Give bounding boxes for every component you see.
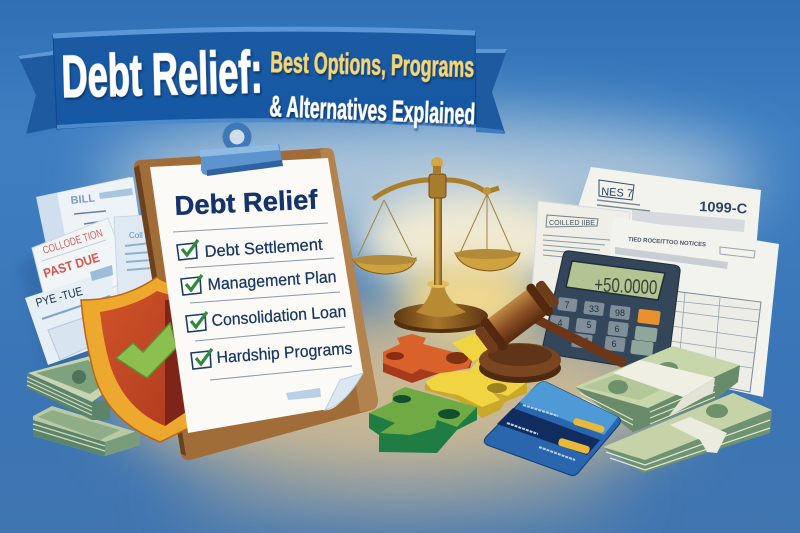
banner right tail xyxy=(476,49,507,134)
bill sheet back xyxy=(36,177,140,322)
1099-C form: 1099-C xyxy=(699,198,748,217)
yellow piece xyxy=(425,334,527,418)
folder sheet: Coll xyxy=(129,231,143,240)
banner highlights xyxy=(53,29,476,127)
item: management plan: Management Plan xyxy=(207,268,337,294)
collection form xyxy=(530,201,630,360)
banner left tail xyxy=(18,51,60,138)
calculator screen: +50.0000 xyxy=(594,274,658,299)
title banner xyxy=(18,29,507,138)
folder sheet xyxy=(114,215,158,300)
1099-C form: NES 7 xyxy=(601,186,633,200)
lower right stack xyxy=(603,393,772,473)
calculator keys xyxy=(549,297,661,356)
upper right stack xyxy=(575,346,740,432)
upper money stack xyxy=(27,356,122,420)
right money stacks xyxy=(575,346,772,473)
credit card xyxy=(484,382,620,476)
subtitle line 2: & Alternatives Explained xyxy=(269,90,476,131)
scale pillar and beam xyxy=(373,157,499,285)
red piece xyxy=(383,334,473,383)
bill sheet: BILL xyxy=(70,192,96,207)
left stack of bills and notices xyxy=(20,177,158,385)
green piece xyxy=(369,387,477,453)
calculator keys: 4 xyxy=(557,318,563,328)
clipboard xyxy=(134,148,378,460)
checklist row lines xyxy=(173,223,352,380)
shield inner xyxy=(100,291,186,426)
lower money stack xyxy=(33,406,140,456)
puzzle pieces xyxy=(369,334,527,453)
scale base xyxy=(394,280,488,333)
gavel handle xyxy=(532,316,628,368)
1099-C form xyxy=(560,167,761,300)
right back documents xyxy=(530,167,779,397)
shield with check xyxy=(81,277,195,442)
bill sheet xyxy=(57,177,150,305)
calculator keys: 33 xyxy=(589,304,599,314)
collection notice xyxy=(32,218,132,312)
checklist paper xyxy=(150,158,363,433)
notices form: TIED ROCEITTOO NOTICES xyxy=(628,237,706,248)
banner main ribbon xyxy=(53,29,476,129)
gavel xyxy=(471,276,628,383)
collection notice: PAST DUE xyxy=(41,249,102,281)
calculator xyxy=(543,251,680,372)
past-due sheet xyxy=(25,265,118,365)
shield body xyxy=(81,277,195,442)
gavel head xyxy=(471,276,563,358)
scales of justice xyxy=(353,157,520,333)
gavel block xyxy=(479,343,561,383)
left money stacks xyxy=(27,356,140,456)
shield check mark xyxy=(116,323,177,378)
item: hardship programs: Hardship Programs xyxy=(216,340,353,367)
past-due sheet: PYE -TUE xyxy=(34,284,84,310)
left pan xyxy=(353,200,417,274)
calculator keys: 6 xyxy=(614,324,620,334)
calculator keys: 1 xyxy=(584,336,590,346)
collection notice: COLLODE TION xyxy=(41,227,104,257)
item: consolidation loan: Consolidation Loan xyxy=(211,303,347,330)
page curl xyxy=(325,373,363,410)
item: debt settlement: Debt Settlement xyxy=(204,236,323,261)
title: Debt Relief: Debt Relief: xyxy=(61,39,263,110)
notices form xyxy=(600,217,779,397)
checklist heading: Debt Relief xyxy=(174,184,319,221)
clipboard clip xyxy=(200,126,283,176)
calculator keys: 5 xyxy=(586,320,592,330)
calculator keys: 7 xyxy=(564,300,570,310)
calculator keys: 98 xyxy=(615,308,625,318)
right pan xyxy=(455,194,520,271)
collection form: COILLED IIBE xyxy=(549,220,595,227)
calculator keys: 6 xyxy=(611,339,617,349)
subtitle line 1: Best Options, Programs xyxy=(270,46,475,84)
